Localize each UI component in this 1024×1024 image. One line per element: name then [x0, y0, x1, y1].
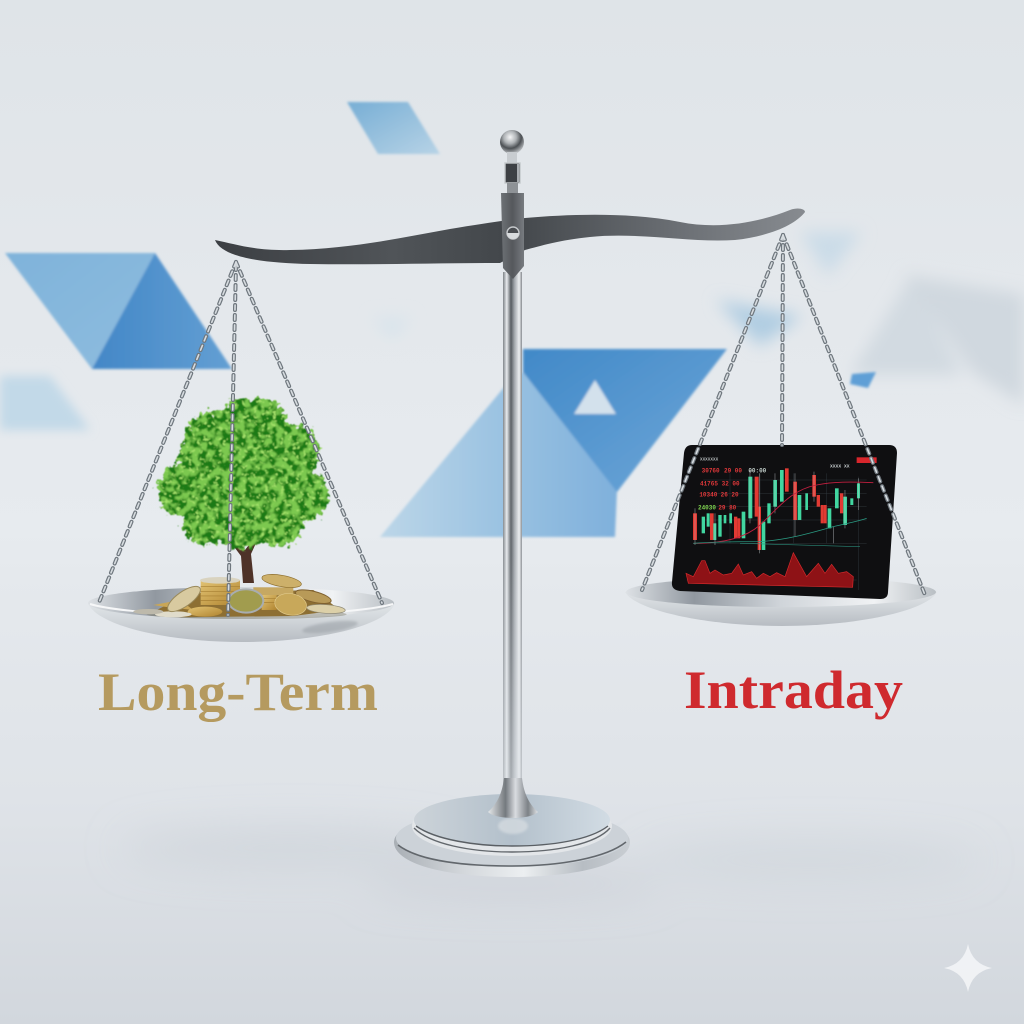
ticker readouts: [698, 458, 850, 511]
label: Long-Term: Long-Term: [98, 662, 378, 722]
area chart: [686, 553, 853, 587]
neck: [505, 152, 520, 194]
candlesticks: [693, 468, 860, 553]
red tag: [857, 457, 877, 463]
right chains: [642, 235, 925, 595]
ticker readouts: XXXX XX: [830, 463, 850, 469]
left large shape: [5, 253, 232, 369]
tree canopy: [157, 397, 329, 550]
ticker readouts: 24030: [698, 504, 716, 511]
grid lines: [687, 473, 867, 590]
stand base: [394, 778, 630, 877]
background geometric shapes: [0, 102, 1024, 537]
curved beam: [215, 209, 805, 264]
base upper disc: [412, 796, 612, 856]
bracket: [501, 193, 524, 279]
ticker readouts: 29 80: [718, 504, 737, 511]
floor shadows: [120, 828, 980, 898]
stand pole: [503, 272, 522, 787]
ticker readouts: 00:00: [748, 468, 767, 475]
ticker readouts: XXXXXXX: [700, 458, 719, 463]
left pan assembly: [88, 262, 395, 642]
beam and head: [215, 130, 805, 279]
tree trunk: [232, 541, 256, 583]
ticker readouts: 29 00: [724, 468, 742, 475]
label: Intraday: Intraday: [684, 660, 903, 720]
ticker readouts: 32 00: [722, 480, 740, 487]
pivot: [507, 227, 519, 239]
ticker readouts: 41765: [700, 480, 718, 487]
ticker readouts: 30760: [702, 468, 720, 475]
tablet body: [672, 445, 897, 599]
left pan dish: [88, 587, 395, 642]
base collar: [488, 778, 538, 818]
ticker readouts: 26 20: [721, 492, 739, 499]
small blue accent: [850, 372, 876, 388]
centre shapes: [380, 349, 727, 537]
left chains: [98, 262, 382, 615]
right pan assembly: [625, 235, 937, 626]
left lower faded shape: [0, 376, 90, 430]
right pan dish: [625, 577, 937, 626]
coins: [133, 572, 347, 619]
tablet with trading chart: [672, 445, 897, 599]
icon: sparkle watermark: [944, 944, 992, 992]
base outer disc: [394, 806, 630, 877]
top knob: [500, 130, 524, 154]
top small triangle: [347, 102, 440, 154]
trend lines: [693, 482, 873, 547]
icon: tree: [157, 397, 329, 583]
faded right shapes: [372, 232, 1024, 405]
ticker readouts: 10340: [699, 492, 718, 499]
